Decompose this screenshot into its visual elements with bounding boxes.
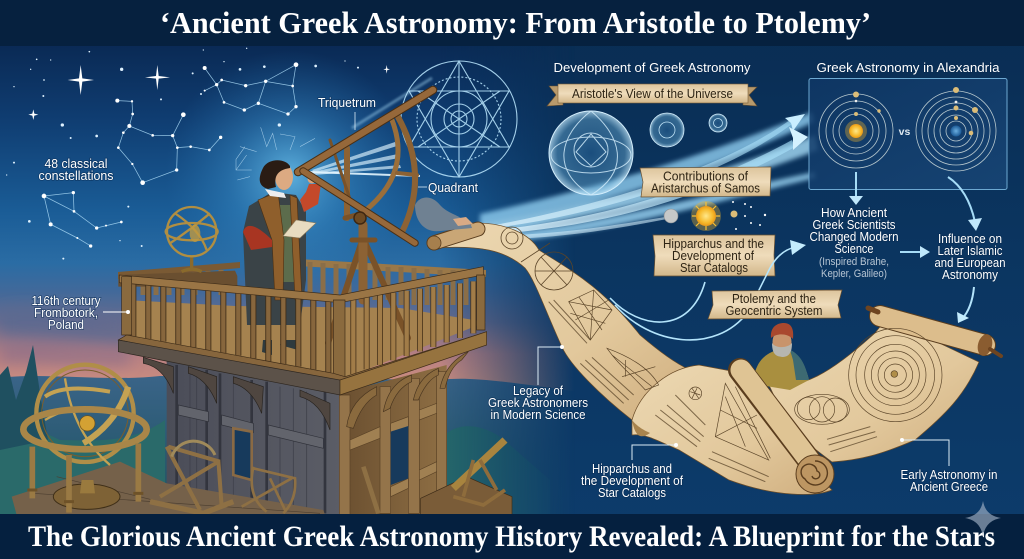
heading: Greek Astronomy in Alexandria: Greek Astronomy in Alexandria <box>816 60 1000 75</box>
scroll section 3 with orbit charts <box>768 318 979 462</box>
text: How Ancient Greek Scientists Changed Modern Science: How Ancient <box>821 206 887 220</box>
moon, sun and stars <box>664 201 766 231</box>
arrow: panel down to How Ancient Greek Scientists <box>849 172 863 205</box>
banner: Contributions of Aristarchus of Samos: Contributions of <box>663 170 748 184</box>
label: Quadrant: Quadrant <box>428 181 478 195</box>
scroll section 2 <box>632 365 832 494</box>
parchment scroll <box>427 223 1001 494</box>
lower deck, tower and instruments <box>12 352 512 515</box>
label: Hipparchus and the Development of Star Catalogs <box>581 443 683 500</box>
vs label: vs <box>899 126 910 138</box>
balcony slab <box>118 332 487 383</box>
wooden tower faces <box>143 352 468 515</box>
small armillary sphere on the balcony table <box>118 207 237 287</box>
left rolled end under the sleeve <box>434 229 478 243</box>
geocentric model <box>916 87 996 171</box>
text: Influence on Later Islamic and European Astronomy: Astronomy <box>942 268 999 282</box>
crystal spheres of Aristotle's universe <box>549 111 727 195</box>
top title band <box>0 0 1024 46</box>
text: Influence on Later Islamic and European Astronomy: and European <box>934 256 1006 270</box>
light sweep from scroll to Alexandria panel <box>470 112 818 244</box>
hand and sleeve holding the scroll <box>415 198 473 231</box>
label: 48 classical constellations: constellations <box>38 169 114 183</box>
top handrail <box>119 267 483 303</box>
label: Hipparchus and the Development of Star Catalogs: the Development of <box>581 474 683 488</box>
label: Early Astronomy in Ancient Greece: Early Astronomy in <box>900 468 998 482</box>
arrow: How Ancient to Influence <box>900 246 930 258</box>
beams of light from the triquetrum to the geometric circle <box>310 78 432 176</box>
label: 48 classical constellations <box>38 157 114 183</box>
text: Influence on Later Islamic and European Astronomy: Influence on <box>938 232 1002 246</box>
title: ‘Ancient Greek Astronomy: From Aristotle to Ptolemy’ <box>160 5 871 40</box>
label: 48 classical constellations: 48 classical <box>44 157 108 171</box>
banner: Hipparchus and the Development of Star Catalogs: Development of <box>672 249 754 263</box>
text: How Ancient Greek Scientists Changed Modern Science: (Inspired Brahe, <box>819 256 889 268</box>
background: night sky fading into navy on the right <box>0 46 600 520</box>
small telescope on table <box>421 440 512 515</box>
diagrams on parchment <box>549 290 942 482</box>
label: 116th century Frombotork, Poland: 116th century <box>32 294 101 308</box>
text: How Ancient Greek Scientists Changed Modern Science: Kepler, Galileo) <box>821 268 887 280</box>
banner: Hipparchus and the Development of Star Catalogs: Star Catalogs <box>680 261 748 275</box>
banner: Aristotle's View of the Universe <box>547 84 757 106</box>
text: How Ancient Greek Scientists Changed Modern Science <box>810 206 899 280</box>
lower wooden deck <box>12 462 325 515</box>
label: Early Astronomy in Ancient Greece <box>900 438 998 494</box>
banner: Ptolemy and the Geocentric System: Ptolemy and the <box>732 292 816 306</box>
astronomer figure <box>243 160 321 355</box>
upper roll on right <box>868 308 1001 357</box>
text: Influence on Later Islamic and European Astronomy <box>934 232 1006 282</box>
label: Legacy of Greek Astronomers in Modern Science: Legacy of <box>513 384 563 398</box>
Ptolemy figure <box>754 323 809 390</box>
arrowheads into panel <box>785 114 805 131</box>
label: Triquetrum: Triquetrum <box>318 96 376 110</box>
banner: Contributions of Aristarchus of Samos: Aristarchus of Samos <box>651 182 760 196</box>
small instruments on deck <box>150 441 378 513</box>
stars and constellations <box>6 48 390 260</box>
banner: Hipparchus and the Development of Star Catalogs <box>653 235 775 276</box>
arrowheads on curved arrows <box>790 240 969 323</box>
paper in hand <box>283 220 316 238</box>
back railing of the balcony <box>118 256 486 305</box>
geometric circle diagram <box>401 61 517 177</box>
curved light arrows from scroll <box>610 247 974 340</box>
banner: Hipparchus and the Development of Star Catalogs: Hipparchus and the <box>663 237 764 251</box>
label: 116th century Frombotork, Poland <box>32 294 130 332</box>
banner: Contributions of Aristarchus of Samos <box>640 167 771 197</box>
hills and forest on the horizon <box>0 345 600 520</box>
big armillary sphere <box>23 365 147 513</box>
label: Triquetrum <box>318 96 376 130</box>
heliocentric model <box>819 92 893 168</box>
bottom subtitle band <box>0 514 1024 559</box>
banner: Ptolemy and the Geocentric System <box>708 290 842 319</box>
arrow: panel to Influence on Later Islamic <box>948 177 982 231</box>
triquetrum and quadrant instrument <box>298 90 433 343</box>
text: How Ancient Greek Scientists Changed Modern Science: Changed Modern <box>810 230 899 244</box>
label: Early Astronomy in Ancient Greece: Ancient Greece <box>910 480 988 494</box>
section heading: Development of Greek Astronomy: Development of Greek Astronomy <box>554 60 751 75</box>
label: 116th century Frombotork, Poland: Frombotork, <box>34 306 98 320</box>
banner: Ptolemy and the Geocentric System: Geocentric System <box>726 304 822 318</box>
scroll section 1 from roll to first fold <box>432 223 690 420</box>
label: Hipparchus and the Development of Star Catalogs: Hipparchus and <box>592 462 672 476</box>
label: Legacy of Greek Astronomers in Modern Science <box>488 345 588 422</box>
text: How Ancient Greek Scientists Changed Modern Science: Greek Scientists <box>812 218 896 232</box>
icon: four-point sparkle watermark <box>965 501 1001 536</box>
banner: Aristotle's View of the Universe: Aristotle's View of the Universe <box>572 87 733 101</box>
label: 116th century Frombotork, Poland: Poland <box>48 318 84 332</box>
label: Legacy of Greek Astronomers in Modern Science: Greek Astronomers <box>488 396 588 410</box>
text: How Ancient Greek Scientists Changed Modern Science: Science <box>834 242 874 256</box>
label: Legacy of Greek Astronomers in Modern Science: in Modern Science <box>490 408 586 422</box>
label: Hipparchus and the Development of Star Catalogs: Star Catalogs <box>598 486 666 500</box>
panel: heliocentric vs geocentric models <box>809 78 1007 190</box>
balcony floor <box>125 300 486 380</box>
central rolled paper <box>740 370 834 493</box>
text: Influence on Later Islamic and European Astronomy: Later Islamic <box>938 244 1002 258</box>
front railing of the balcony <box>118 267 487 395</box>
